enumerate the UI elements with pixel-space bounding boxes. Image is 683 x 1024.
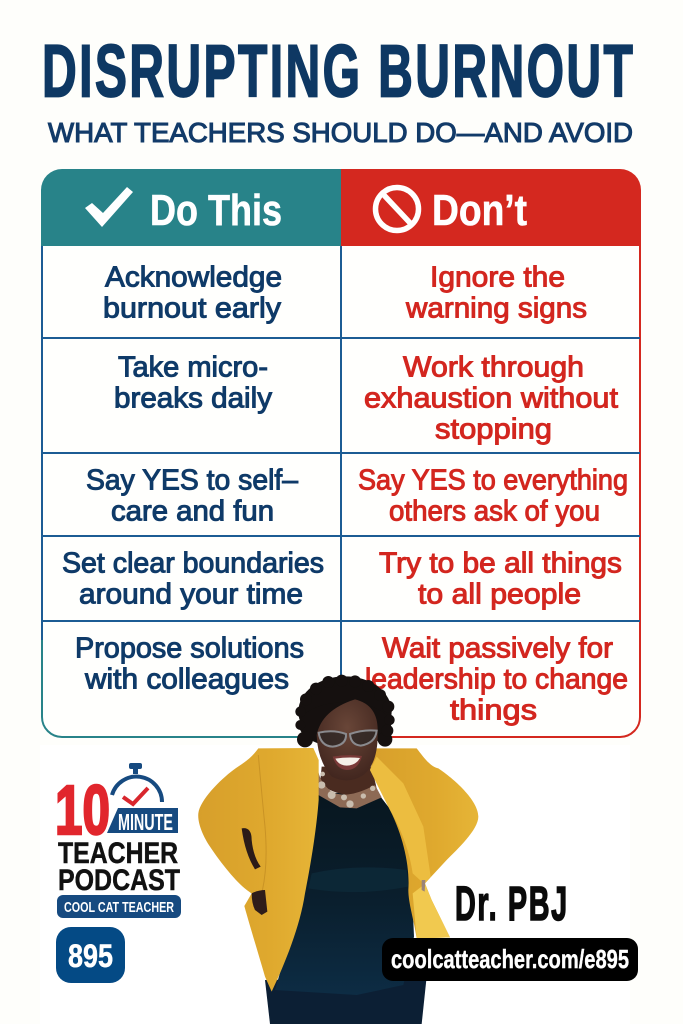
row 3 do [86, 464, 298, 527]
necklace [318, 772, 382, 808]
panel: comparison table [41, 169, 641, 737]
row 1 do: burnout early [103, 292, 282, 324]
glasses [319, 730, 377, 747]
row 4 don't: Try to be all things [379, 547, 622, 579]
row 5 do: with colleagues [84, 663, 289, 695]
header: don't [341, 169, 641, 246]
row 3 do: care and fun [111, 495, 274, 527]
logo badge minute [107, 808, 178, 835]
photo: Dr. PBJ in yellow jacket [198, 675, 478, 1024]
hands [242, 828, 425, 915]
row 5 do: Propose solutions [75, 632, 304, 664]
header: do this: Do This [150, 186, 282, 235]
row 5 don't: things [450, 694, 537, 726]
row 3 do: Say YES to self– [86, 464, 298, 496]
row 1 don't [405, 261, 587, 324]
face [317, 699, 378, 780]
table background [42, 170, 640, 737]
row 2 don't: Work through [403, 351, 584, 383]
podcast logo [55, 763, 181, 918]
title: DISRUPTING BURNOUT [42, 31, 633, 113]
logo text podcast: PODCAST [58, 864, 180, 897]
icon: check mark [85, 187, 133, 227]
header: don't: Don’t [432, 186, 527, 235]
hair [295, 675, 395, 748]
row 5 don't: Wait passively for [382, 632, 614, 664]
row 5 don't: leadership to change [365, 663, 628, 695]
row 3 don't [358, 464, 628, 527]
row 3 don't: Say YES to everything [358, 464, 628, 496]
jacket [198, 748, 478, 992]
row 2 do [114, 351, 273, 414]
row 4 do [62, 547, 324, 610]
smile [333, 755, 362, 770]
row 2 do: Take micro- [118, 351, 268, 383]
row 2 do: breaks daily [114, 382, 273, 414]
episode badge: 895 [68, 938, 113, 974]
row 2 don't: exhaustion without [364, 382, 618, 414]
neck [320, 767, 377, 795]
logo badge minute: MINUTE [118, 809, 173, 835]
row 4 don't [379, 547, 622, 610]
row 1 do [103, 261, 282, 324]
column: don't items [358, 261, 628, 726]
subtitle: WHAT TEACHERS SHOULD DO—AND AVOID [48, 117, 633, 148]
row 1 do: Acknowledge [105, 261, 282, 293]
logo number 10: 10 [55, 771, 110, 849]
row 5 do [75, 632, 304, 695]
icon: stopwatch [112, 763, 162, 804]
pants [265, 977, 427, 1024]
row 5 don't [365, 632, 628, 726]
column: do this items [62, 261, 324, 695]
row 3 don't: others ask of you [389, 495, 600, 527]
row 4 do: around your time [79, 578, 303, 610]
top [275, 792, 414, 995]
row 4 don't: to all people [418, 578, 581, 610]
logo pill cool cat teacher: COOL CAT TEACHER [64, 900, 174, 916]
url pill [382, 938, 638, 981]
episode badge [56, 927, 125, 983]
logo text teacher: TEACHER [58, 837, 178, 870]
logo pill cool cat teacher [57, 895, 181, 918]
row 1 don't: warning signs [405, 292, 587, 324]
row 4 do: Set clear boundaries [62, 547, 324, 579]
row 2 don't: stopping [435, 413, 552, 445]
row 2 don't [364, 351, 618, 445]
icon: prohibition sign [376, 188, 418, 230]
row 1 don't: Ignore the [430, 261, 565, 293]
table borders [42, 246, 640, 737]
header: do this [41, 169, 341, 246]
guest name: Dr. PBJ [455, 878, 567, 931]
